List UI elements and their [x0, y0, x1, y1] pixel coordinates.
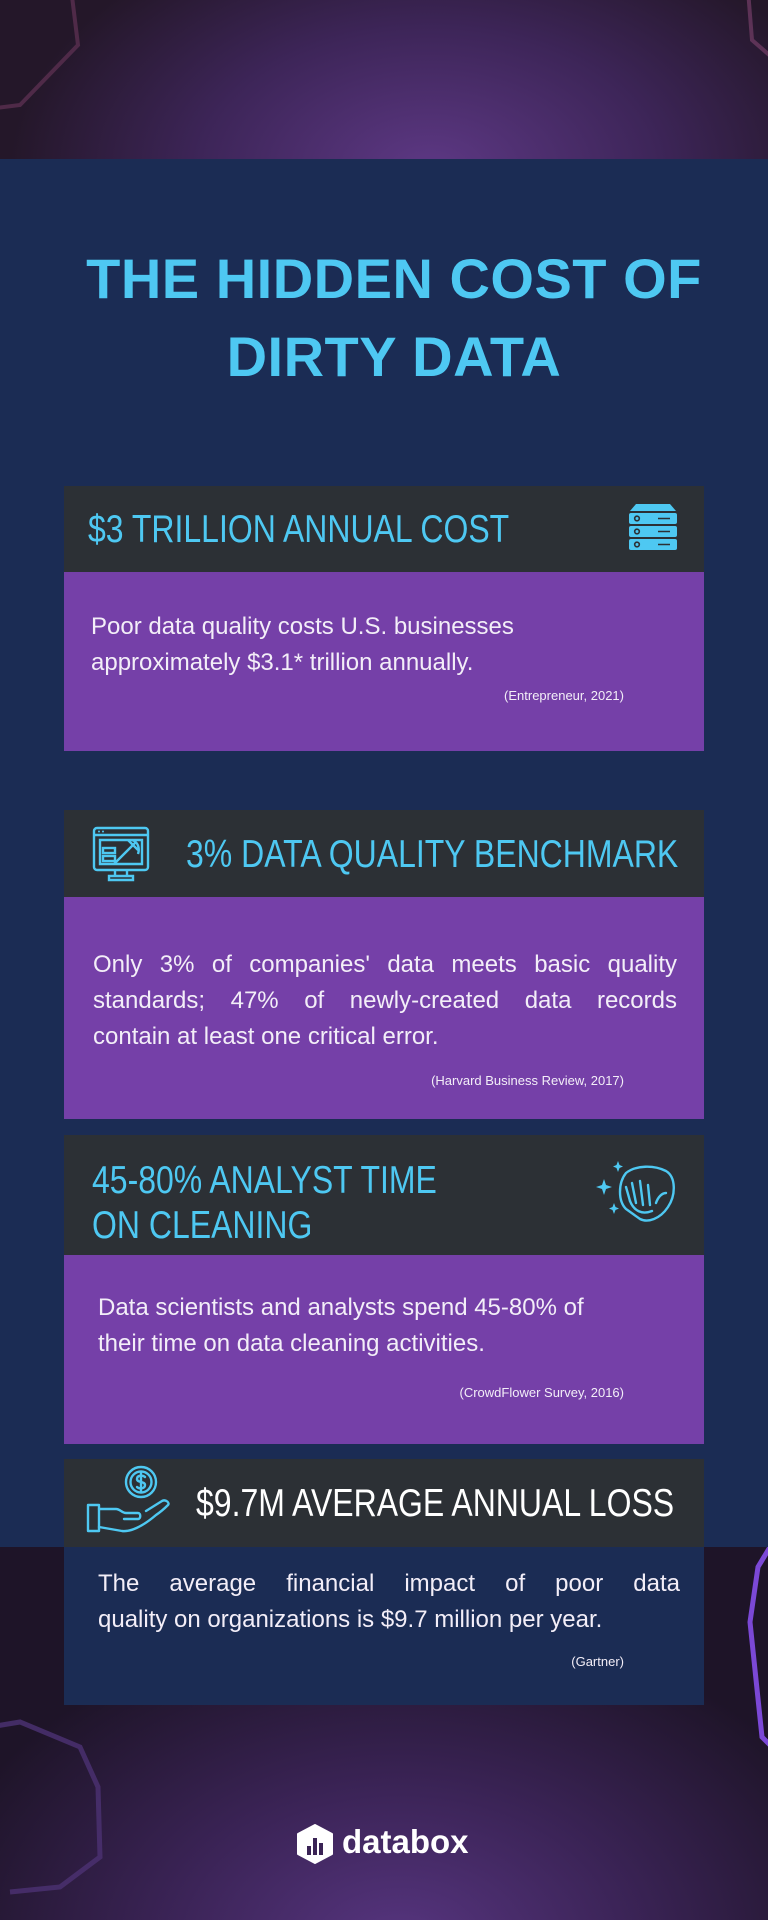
body	[64, 897, 704, 1119]
panel: 3% benchmark	[64, 810, 704, 1119]
icon: databox hexagon	[297, 1824, 333, 1864]
bottom background band	[0, 1547, 768, 1920]
heading	[92, 1159, 437, 1247]
body: (Gartner)	[571, 1654, 624, 1669]
body: (CrowdFlower Survey, 2016)	[460, 1385, 624, 1400]
body: (Entrepreneur, 2021)	[504, 688, 624, 703]
body: approximately $3.1* trillion annually.	[91, 649, 473, 676]
title: THE HIDDEN COST OF	[86, 247, 702, 310]
heading: $9.7M AVERAGE ANNUAL LOSS	[196, 1482, 674, 1525]
logo text: databox	[342, 1823, 469, 1860]
body	[64, 572, 704, 751]
body: Data scientists and analysts spend 45-80% of	[98, 1294, 584, 1321]
icon: server	[629, 504, 677, 550]
header bar	[64, 810, 704, 897]
body	[64, 1547, 704, 1705]
body: Poor data quality costs U.S. businesses	[91, 613, 514, 640]
icon: monitor with tools	[92, 826, 150, 882]
body: (Harvard Business Review, 2017)	[431, 1073, 624, 1088]
heading: ON CLEANING	[92, 1204, 312, 1247]
body: standards; 47% of newly-created data records	[93, 987, 677, 1014]
title: DIRTY DATA	[227, 325, 561, 388]
title	[86, 247, 702, 388]
header bar	[64, 1459, 704, 1547]
top background band	[0, 0, 768, 159]
body: quality on organizations is $9.7 million per year.	[98, 1606, 602, 1633]
body: contain at least one critical error.	[93, 1023, 439, 1050]
header bar	[64, 1135, 704, 1255]
body: Only 3% of companies' data meets basic quality	[93, 951, 677, 978]
body: The average financial impact of poor data	[98, 1570, 680, 1597]
panel: 45-80% analyst time	[64, 1135, 704, 1444]
header bar	[64, 486, 704, 572]
heading: $3 TRILLION ANNUAL COST	[88, 508, 509, 551]
body	[64, 1255, 704, 1444]
icon: hand with coin	[86, 1466, 170, 1532]
body: their time on data cleaning activities.	[98, 1330, 485, 1357]
panel: $9.7M annual loss	[64, 1459, 704, 1705]
logo: databox	[297, 1823, 469, 1864]
heading: 3% DATA QUALITY BENCHMARK	[186, 833, 678, 876]
panel: $3 trillion	[64, 486, 704, 751]
icon: cleaning hand	[596, 1161, 675, 1222]
heading: 45-80% ANALYST TIME	[92, 1159, 437, 1202]
